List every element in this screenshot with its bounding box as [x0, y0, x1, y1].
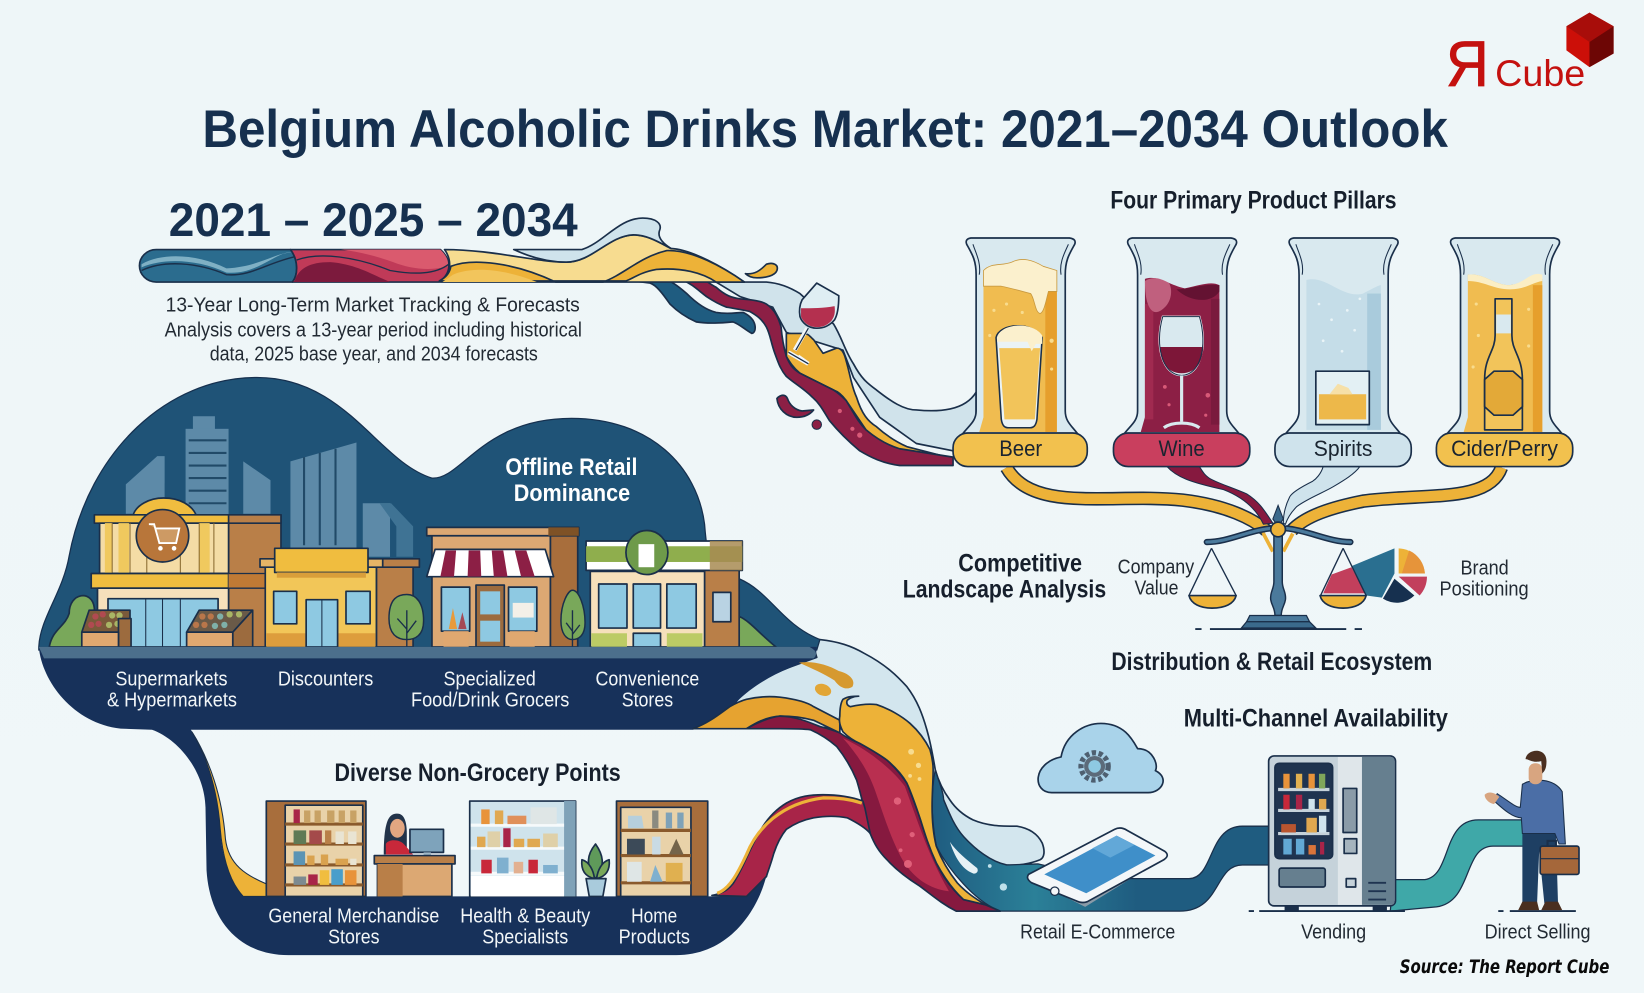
- label: company value: [1118, 557, 1194, 599]
- heading: offline retail: [505, 454, 637, 507]
- labels: offline channels: [107, 669, 699, 712]
- pale stream: [716, 282, 976, 451]
- heading: offline retail: Offline Retail: [505, 454, 637, 481]
- river: pale splash: [734, 640, 1044, 865]
- label: brand positioning: Positioning: [1440, 579, 1529, 601]
- pillar: spirits: [1275, 238, 1411, 467]
- pillar: wine: Wine: [1159, 436, 1205, 461]
- icon: tilted wine glass: [788, 283, 839, 364]
- panel: navy retail band and non-grocery tray: [39, 647, 817, 955]
- pillar: cider/perry: [1436, 238, 1573, 467]
- produce crates and bush: [49, 596, 253, 647]
- labels: non-grocery channels: Health & Beauty: [460, 906, 590, 928]
- river: distribution flow: [693, 662, 1274, 911]
- labels: offline channels: Specialized: [444, 669, 536, 691]
- heading: four primary product pillars: Four Primary Product Pillars: [1110, 187, 1397, 215]
- icon: balance scale: [1189, 505, 1366, 629]
- logo: RCube: Я: [1446, 27, 1489, 100]
- icon: vending machine: [1249, 756, 1405, 911]
- heading: offline retail: Dominance: [514, 480, 630, 507]
- heading: competitive landscape analysis: Competitive: [958, 549, 1082, 577]
- cloud backdrop: [39, 377, 820, 650]
- timeline description: Analysis covers a 13-year period including historical: [165, 320, 582, 342]
- heading: diverse non-grocery points: Diverse Non-Grocery Points: [334, 759, 621, 787]
- blue segment: [139, 250, 297, 282]
- blue tail: [626, 275, 755, 333]
- pie chart: [1351, 548, 1427, 603]
- icon: cashier at desk: [374, 814, 455, 896]
- crimson splash: [777, 395, 814, 417]
- pale splash: [514, 218, 671, 262]
- crimson highlight: [843, 738, 949, 891]
- store: specialized grocer: [427, 527, 585, 647]
- labels: offline channels: Food/Drink Grocers: [411, 690, 569, 712]
- gold stream: [786, 333, 939, 455]
- pillar: spirits: Spirits: [1314, 436, 1372, 461]
- crimson main: [747, 716, 1000, 911]
- blue channel: [932, 770, 1274, 911]
- pillar: wine: [1113, 238, 1250, 467]
- panel: offline retail: [39, 377, 820, 650]
- labels: non-grocery channels: Home: [631, 906, 677, 928]
- labels: non-grocery channels: [268, 906, 690, 949]
- gold droplets: [799, 662, 853, 688]
- labels: non-grocery channels: Products: [619, 927, 690, 949]
- timeline description: data, 2025 base year, and 2034 forecasts: [210, 344, 538, 366]
- pillar: beer: Beer: [999, 436, 1042, 461]
- heading: distribution and retail ecosystem: Distribution & Retail Ecosystem: [1111, 648, 1432, 676]
- timeline heading: 2021 – 2025 – 2034: [169, 193, 578, 246]
- gold main: [839, 696, 986, 905]
- channel labels: [1020, 921, 1591, 943]
- pillar: beer: [953, 238, 1087, 467]
- icon: health and beauty shelf: [470, 801, 576, 896]
- droplet: [745, 263, 777, 278]
- label: company value: Value: [1134, 577, 1178, 599]
- labels: offline channels: Stores: [622, 690, 673, 712]
- skyline: [126, 416, 413, 557]
- icon: general merchandise shelf: [266, 801, 366, 896]
- gold ribbon: [439, 251, 744, 282]
- gold left pool: [693, 697, 840, 733]
- timeline description: [165, 294, 582, 366]
- store: convenience: [586, 531, 776, 647]
- icon: smartphone: [1028, 828, 1168, 907]
- pale sliver: [950, 842, 978, 874]
- channel labels: Direct Selling: [1485, 921, 1591, 943]
- labels: non-grocery channels: General Merchandise: [268, 906, 439, 928]
- label: company value: Company: [1118, 557, 1194, 579]
- labels: offline channels: Convenience: [596, 669, 699, 691]
- logo: RCube: [1446, 13, 1614, 100]
- icon: potted plant: [582, 844, 609, 896]
- crimson stream: [656, 270, 953, 466]
- label: brand positioning: [1440, 558, 1529, 601]
- labels: offline channels: Supermarkets: [115, 669, 228, 691]
- labels: offline channels: Discounters: [278, 669, 373, 691]
- heading: multi-channel availability: Multi-Channel Availability: [1184, 705, 1448, 733]
- channel labels: Retail E-Commerce: [1020, 921, 1175, 943]
- title: Belgium Alcoholic Drinks Market: 2021–2034 Outlook: [202, 101, 1449, 159]
- heading: competitive landscape analysis: Landscape Analysis: [903, 576, 1106, 604]
- crimson branch: [712, 795, 870, 896]
- pillar connectors: [1007, 467, 1501, 551]
- label: brand positioning: Brand: [1461, 558, 1509, 580]
- labels: non-grocery channels: Stores: [328, 927, 380, 949]
- store: discounter: [260, 548, 424, 647]
- labels: non-grocery channels: Specialists: [482, 927, 568, 949]
- pale gold ribbon: [440, 235, 744, 282]
- channel labels: Vending: [1301, 921, 1366, 943]
- teal ribbon: [1390, 820, 1524, 911]
- heading: competitive landscape analysis: [903, 549, 1106, 604]
- timeline description: 13-Year Long-Term Market Tracking & Forecasts: [166, 294, 580, 316]
- logo: RCube: Cube: [1495, 53, 1585, 94]
- store: supermarket: [91, 498, 281, 647]
- icon: cloud with gear: [1038, 723, 1163, 793]
- road strip: [39, 647, 816, 658]
- timeline river bar: [139, 218, 976, 466]
- gold ribbon in neck: [192, 732, 266, 896]
- icon: home products shelf: [616, 801, 708, 896]
- crimson segment: [290, 250, 449, 282]
- labels: offline channels: & Hypermarkets: [107, 690, 237, 712]
- icon: salesperson with briefcase: [1485, 751, 1579, 911]
- pillar: cider/perry: Cider/Perry: [1451, 436, 1558, 461]
